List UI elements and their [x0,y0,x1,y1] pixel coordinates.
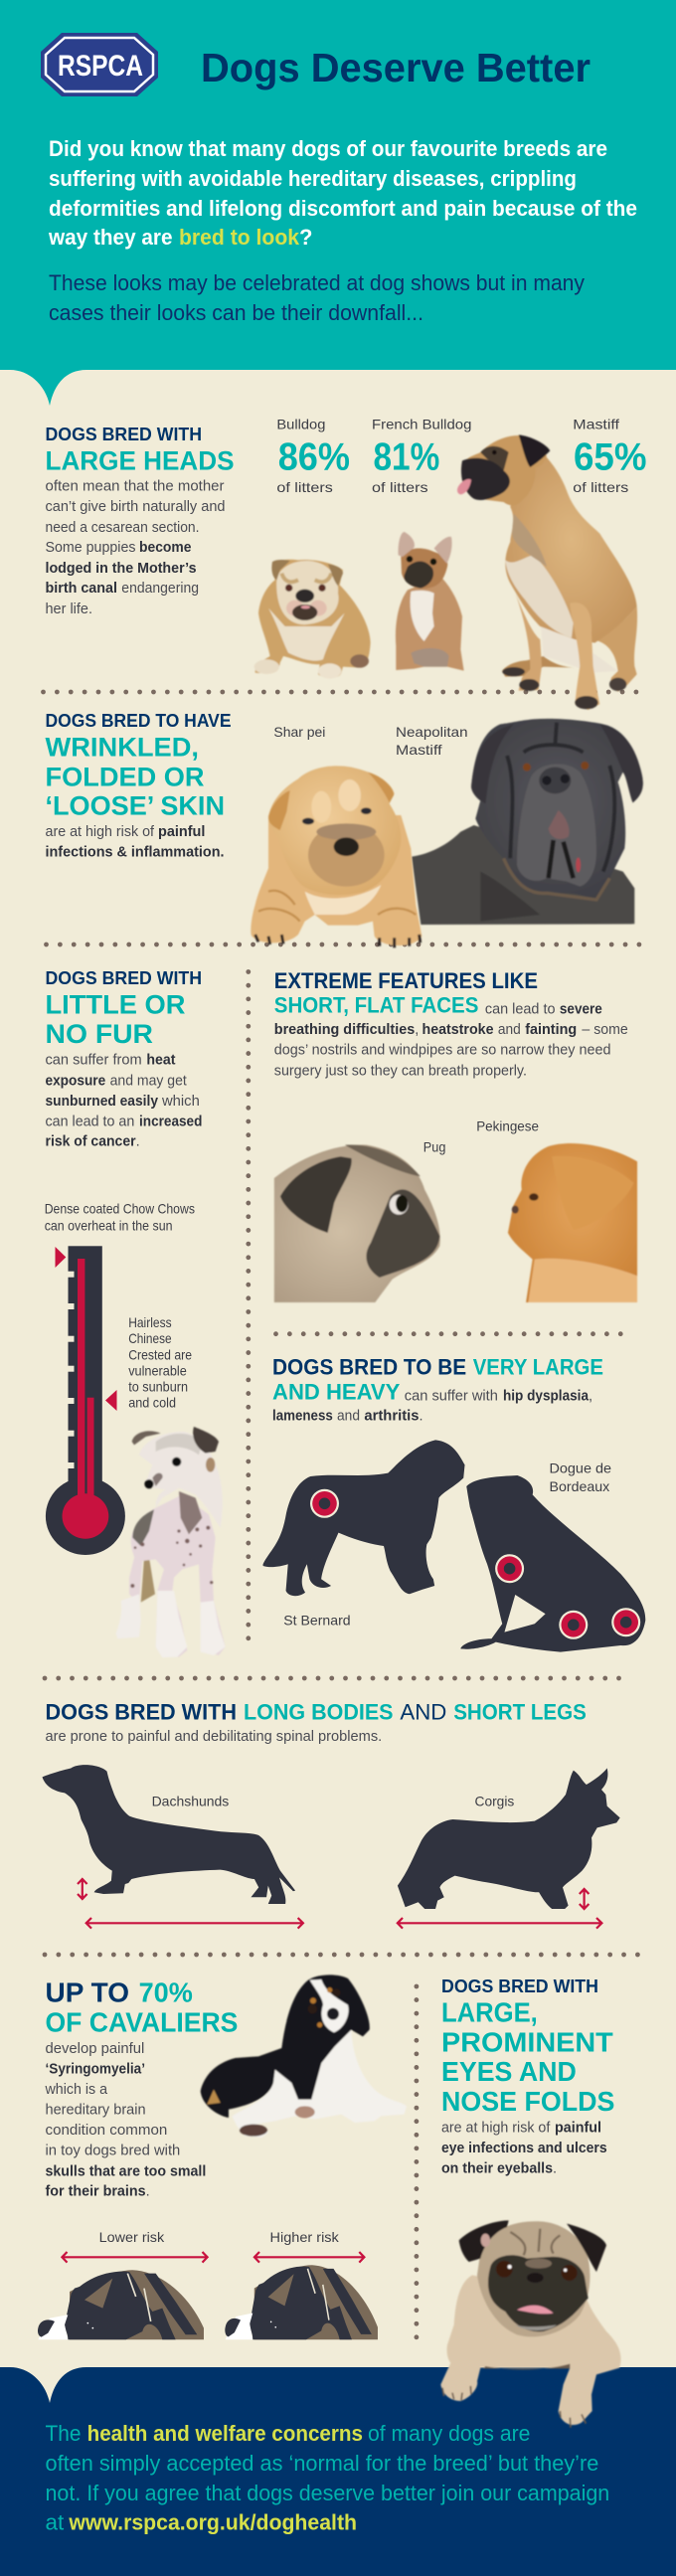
icon: st bernard silhouette [263,1440,465,1596]
heading: prominent eyes: LARGE, [441,1996,538,2027]
label: dachshunds: Dachshunds [152,1794,229,1809]
text: cavaliers body: condition common [46,2123,167,2139]
panel: cavaliers [38,1975,407,2339]
heading: long bodies and short legs: SHORT LEGS [453,1699,587,1724]
heading: long bodies and short legs [46,1699,587,1724]
text: cavaliers body: ‘Syringomyelia’ [46,2061,145,2077]
text: call to action: The [46,2421,82,2446]
text: spinal problems: are prone to painful and debilitating spinal problems. [46,1729,382,1745]
text: wrinkled skin body [46,824,225,860]
photo: pug front [440,2220,621,2428]
label: shar pei: Shar pei [273,724,325,740]
heading: large heads: DOGS BRED WITH [46,425,202,444]
heading: cavaliers [46,1976,238,2037]
label: dogue de bordeaux: Bordeaux [549,1478,609,1494]
stat: bulldog 86%: 86% [278,435,350,479]
stat: mastiff 65%: 65% [574,435,646,479]
text: call to action: not. If you agree that dogs deserve better join our campaign [46,2481,609,2505]
label: chow chows: can overheat in the sun [45,1217,173,1233]
stat: french bulldog 81%: 81% [374,435,439,479]
heading: wrinkled skin: FOLDED OR [46,762,205,791]
heading: long bodies and short legs: AND [400,1699,446,1724]
text: little or no fur body: . [136,1134,140,1150]
photo: mastiff [457,434,637,710]
text: call to action: often simply accepted as ‘normal for the breed’ but they’re [46,2451,598,2476]
text: large and heavy body: , [589,1388,592,1404]
heading: prominent eyes: PROMINENT [441,2026,613,2057]
label: lower risk: Lower risk [99,2229,165,2245]
heading: cavaliers: UP TO [46,1976,129,2007]
markers: joint pain [310,1489,640,1639]
text: prominent eyes body: . [553,2160,557,2176]
label: neapolitan mastiff: Mastiff [396,742,442,758]
label: hairless chinese crested: to sunburn [128,1378,188,1394]
icon: RSPCA logo: RSPCA [58,50,143,83]
heading: wrinkled skin: WRINKLED, [46,733,199,763]
sub-intro text: cases their looks can be their downfall... [49,300,423,325]
icon: corgi silhouette [398,1768,620,1909]
text: large and heavy body: can suffer with [405,1388,498,1404]
text: call to action: at [46,2509,64,2534]
arrows: body length and leg height [78,1879,601,1929]
text: call to action [46,2421,609,2534]
illustration: lower risk skull [38,2270,204,2339]
text: large heads body: her life. [46,601,92,617]
text: large heads body: endangering [121,581,199,597]
text: cavaliers body: hereditary brain [46,2103,146,2119]
label: hairless chinese crested: Hairless [128,1314,172,1330]
stat: mastiff 65%: Mastiff [573,416,619,431]
stat: french bulldog 81% [372,416,471,495]
heading: large heads: LARGE HEADS [46,445,235,475]
label: corgis: Corgis [475,1794,514,1809]
text: call to action: health and welfare concerns [87,2421,363,2446]
stat: french bulldog 81%: of litters [372,479,428,495]
heading: wrinkled skin [46,711,231,821]
text: prominent eyes body: painful [555,2120,601,2136]
label: pug: Pug [423,1138,445,1154]
heading: wrinkled skin: DOGS BRED TO HAVE [46,711,231,731]
panel: large and heavy [263,1355,645,1652]
photo: bulldog [254,560,371,679]
text: large heads body [46,479,225,617]
heading: short flat faces: SHORT, FLAT FACES [274,992,478,1017]
label: higher risk: Higher risk [270,2229,340,2245]
heading: prominent eyes: DOGS BRED WITH [441,1976,598,1996]
text: short flat faces body: breathing difficulties [274,1022,415,1038]
illustration: higher risk skull [225,2265,378,2339]
stat: bulldog 86% [276,416,350,495]
text: little or no fur body [46,1053,202,1150]
photo: neapolitan mastiff [412,719,643,925]
label: neapolitan mastiff [396,724,467,758]
panel: prominent eyes [441,1976,614,2176]
heading: cavaliers: 70% [139,1976,193,2007]
stat: mastiff 65% [573,416,646,495]
text: little or no fur body: increased [139,1114,202,1129]
text: large heads body: can’t give birth naturally and [46,499,225,515]
heading: large heads [46,425,235,475]
text: little or no fur body: sunburned easily [46,1094,158,1110]
text: wrinkled skin body: infections & inflammation. [46,844,225,860]
icon: dogue de bordeaux silhouette [460,1475,645,1652]
text: large heads body: lodged in the Mother’s [46,561,197,577]
label: dogue de bordeaux [549,1460,611,1494]
stat: bulldog 86%: Bulldog [276,416,325,431]
text: short flat faces body [274,1001,628,1079]
text: cavaliers body: for their brains [46,2184,146,2200]
heading: long bodies and short legs: DOGS BRED WITH [46,1699,237,1724]
intro text [48,136,637,250]
text: short flat faces body: , [415,1022,419,1038]
text: prominent eyes body: eye infections and ulcers [441,2141,607,2156]
icon: RSPCA logo [41,33,158,96]
heading: cavaliers: OF CAVALIERS [46,2006,238,2037]
panel: long bodies and short legs [43,1699,620,1929]
heading: prominent eyes [441,1976,614,2117]
text: short flat faces body: surgery just so they can breath properly. [274,1063,527,1079]
intro text: way they are [48,225,173,250]
text: prominent eyes body: are at high risk of [441,2120,551,2136]
heading: very large and heavy [272,1355,603,1405]
label: hairless chinese crested: and cold [128,1394,176,1410]
text: little or no fur body: heat [146,1053,176,1069]
heading: short flat faces: EXTREME FEATURES LIKE [274,968,538,993]
panel: little or no fur [45,968,226,1657]
heading: little or no fur: LITTLE OR [46,989,185,1019]
text: large heads body: need a cesarean section. [46,520,199,536]
text: large and heavy body: lameness [272,1408,333,1424]
panel: navy footer [0,2367,676,2576]
panel: wrinkled skin [46,711,643,947]
stat: french bulldog 81%: French Bulldog [372,416,471,431]
label: hairless chinese crested: vulnerable [128,1362,187,1378]
label: chow chows [45,1201,195,1233]
arrows: skull width [62,2252,364,2263]
text: short flat faces body: – some [582,1022,628,1038]
heading: little or no fur: DOGS BRED WITH [46,968,202,988]
stat: bulldog 86%: of litters [276,479,333,495]
photo: shar pei [251,766,422,947]
label: neapolitan mastiff: Neapolitan [396,724,467,740]
chart: thermometer [46,1246,125,1555]
intro text: bred to look [179,225,300,250]
label: hairless chinese crested: Crested are [128,1346,192,1362]
heading: long bodies and short legs: LONG BODIES [244,1699,394,1724]
sub-intro text [49,270,585,325]
text: little or no fur body: exposure [46,1073,105,1089]
text: call to action: www.rspca.org.uk/doghealth [68,2509,357,2534]
sub-intro text: These looks may be celebrated at dog shows but in many [49,270,585,295]
text: short flat faces body: severe [560,1001,602,1017]
text: large and heavy body: arthritis [364,1408,420,1424]
text: large heads body: birth canal [46,581,117,597]
text: cavaliers body: in toy dogs bred with [46,2144,180,2159]
text: prominent eyes body: on their eyeballs [441,2160,553,2176]
text: cavaliers body [45,2041,206,2200]
text: call to action: of many dogs are [368,2421,530,2446]
text: cavaliers body: develop painful [46,2041,144,2057]
panel: short flat faces [274,968,637,1302]
intro text: suffering with avoidable hereditary diseases, crippling [49,166,577,191]
text: short flat faces body: and [498,1022,521,1038]
heading: very large and heavy: VERY LARGE [473,1355,603,1380]
heading: little or no fur: NO FUR [46,1019,153,1049]
photo: french bulldog [396,532,464,671]
photo: chinese crested [116,1427,226,1657]
label: chow chows: Dense coated Chow Chows [45,1201,195,1217]
text: little or no fur body: risk of cancer [46,1134,136,1150]
label: dogue de bordeaux: Dogue de [549,1460,611,1476]
label: st bernard: St Bernard [283,1612,351,1628]
text: short flat faces body: dogs’ nostrils and windpipes are so narrow they need [274,1043,610,1059]
text: little or no fur body: which [161,1094,200,1110]
photo: cavalier [201,1975,407,2138]
heading: short flat faces [274,968,538,1017]
intro text: ? [299,225,312,250]
text: large and heavy body [272,1388,592,1424]
stat: mastiff 65%: of litters [573,479,628,495]
intro text: deformities and lifelong discomfort and pain because of the [49,196,637,221]
text: large and heavy body: and [337,1408,360,1424]
heading: wrinkled skin: ‘LOOSE’ SKIN [46,791,225,821]
heading: prominent eyes: EYES AND [441,2056,577,2087]
panel: large heads [46,416,646,710]
icon: dachshund silhouette [43,1765,295,1904]
label: hairless chinese crested: Chinese [128,1330,172,1346]
photo: pekingese [508,1143,637,1302]
title: Dogs Deserve Better [201,45,591,90]
heading: prominent eyes: NOSE FOLDS [441,2086,614,2117]
text: wrinkled skin body: painful [158,824,205,840]
panel: teal header [0,0,676,406]
text: cavaliers body: skulls that are too small [46,2163,206,2179]
text: wrinkled skin body: are at high risk of [46,824,155,840]
text: little or no fur body: can lead to an [46,1114,134,1129]
label: hairless chinese crested [128,1314,192,1410]
text: large heads body: Some puppies [46,540,135,556]
intro text: Did you know that many dogs of our favourite breeds are [49,136,607,161]
text: large heads body: become [139,540,191,556]
text: large heads body: often mean that the mother [46,479,225,495]
text: short flat faces body: heatstroke [422,1022,493,1038]
photo: pug side [274,1144,440,1302]
text: little or no fur body: and may get [110,1073,187,1089]
text: short flat faces body: fainting [525,1022,577,1038]
heading: very large and heavy: AND HEAVY [272,1380,401,1405]
text: cavaliers body: . [146,2184,150,2200]
text: large and heavy body: . [420,1408,423,1424]
label: pekingese: Pekingese [476,1117,539,1133]
heading: little or no fur [46,968,202,1049]
text: large and heavy body: hip dysplasia [503,1388,590,1404]
text: prominent eyes body [441,2120,607,2176]
text: short flat faces body: can lead to [485,1001,555,1017]
heading: very large and heavy: DOGS BRED TO BE [272,1355,466,1380]
text: little or no fur body: can suffer from [46,1053,142,1069]
text: cavaliers body: which is a [45,2082,108,2098]
